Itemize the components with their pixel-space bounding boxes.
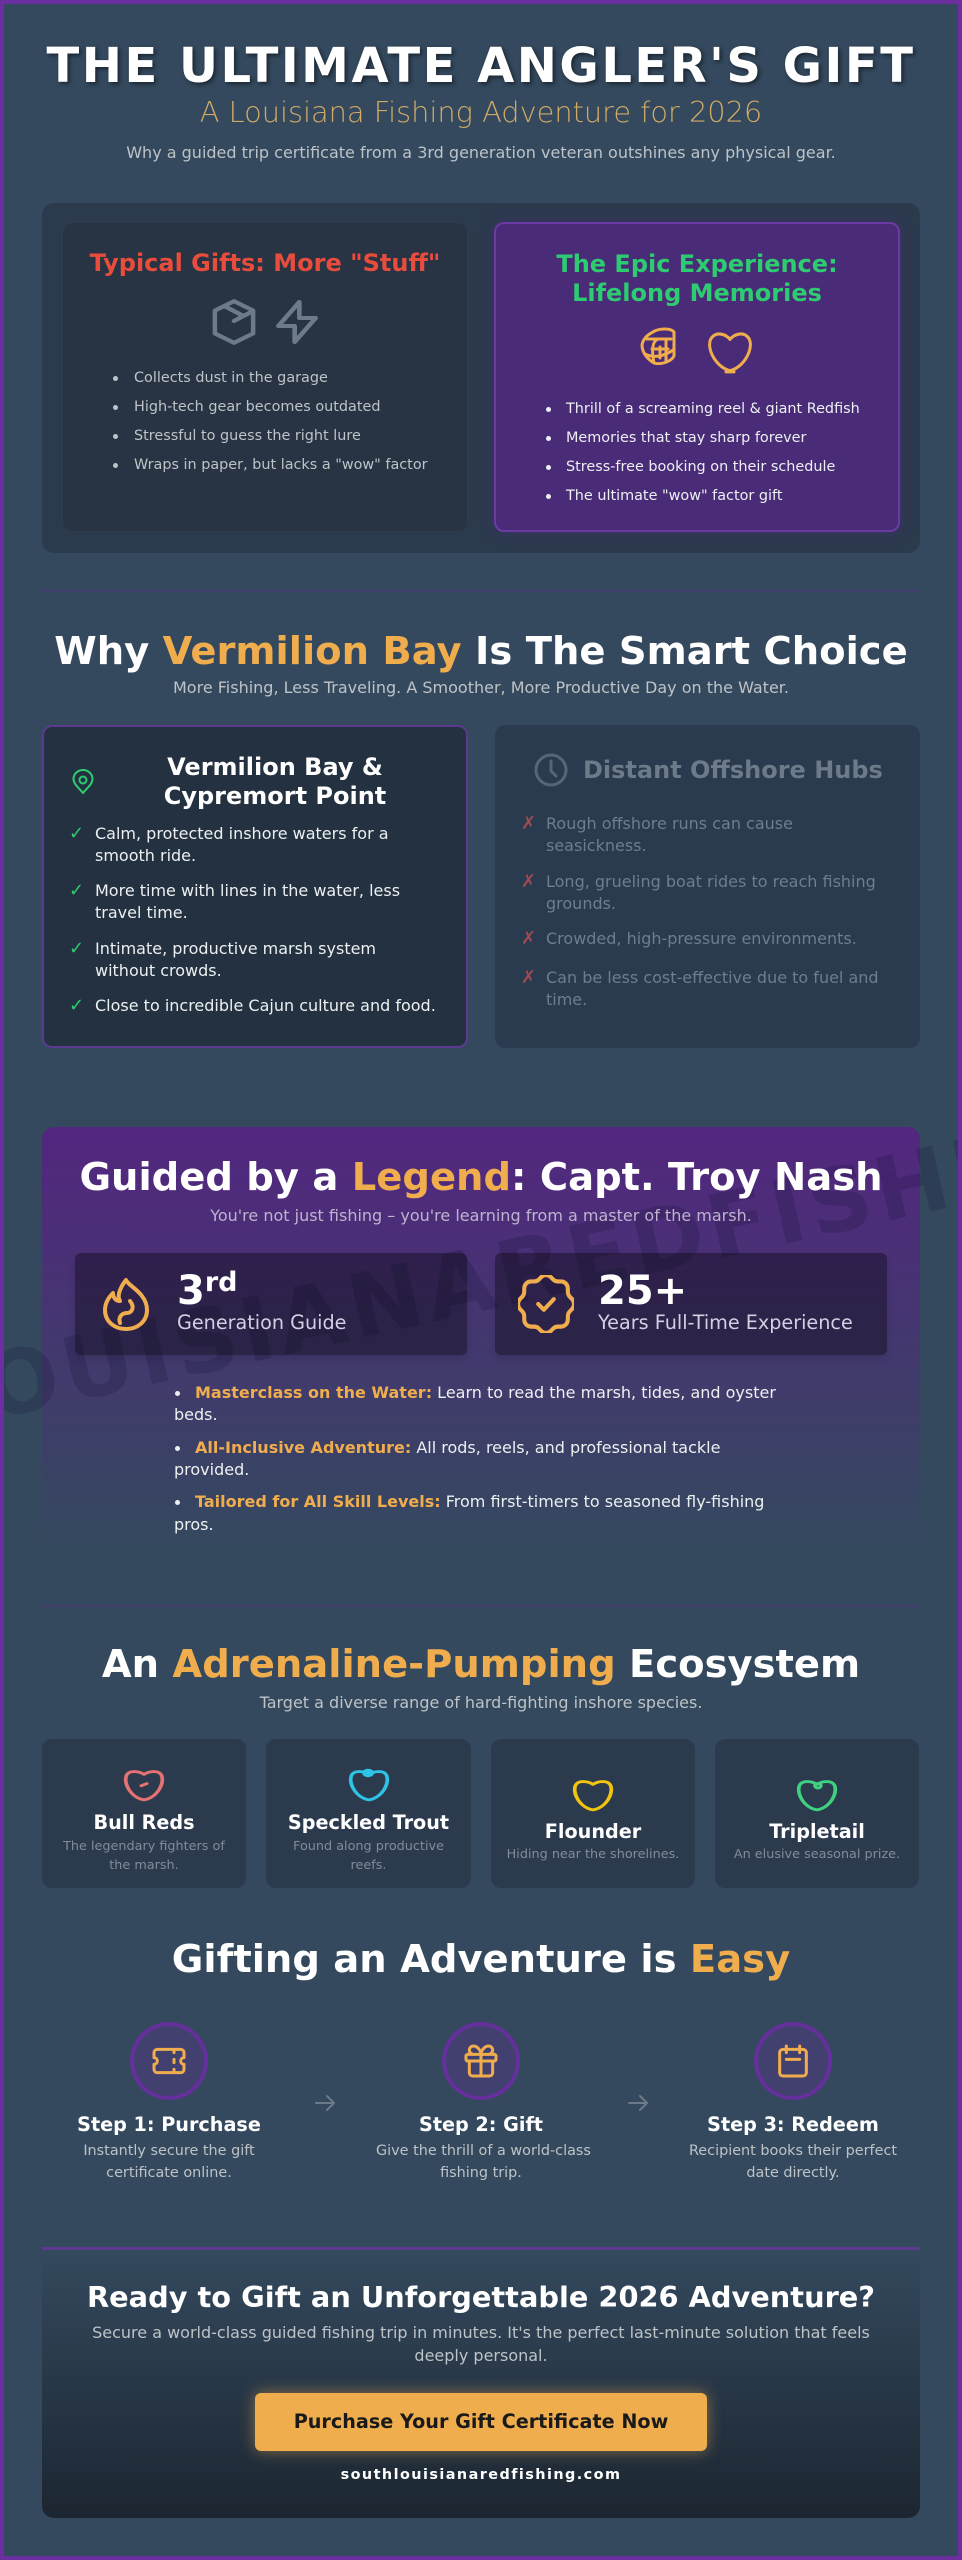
species card: tripletail xyxy=(715,1739,919,1888)
heading: vermilion bay xyxy=(164,752,386,810)
arrow: step 2 to 3 xyxy=(628,2095,648,2111)
step title: purchase: Step 1: Purchase xyxy=(77,2113,261,2136)
step description: purchase xyxy=(83,2143,255,2181)
arrow: step 1 to 2 xyxy=(315,2095,335,2111)
list: vermilion bay benefits xyxy=(69,823,436,1016)
species card: flounder xyxy=(491,1739,695,1888)
description: speckled trout: Found along productive xyxy=(293,1839,444,1854)
list: vermilion bay benefits: Close to incredible Cajun culture and food. xyxy=(95,996,436,1015)
icon: map pin xyxy=(72,769,94,794)
list: typical gift drawbacks: High-tech gear becomes outdated xyxy=(134,399,380,415)
list: vermilion bay benefits: smooth ride. xyxy=(95,846,196,865)
list: typical gift drawbacks: Wraps in paper, but lacks a "wow" factor xyxy=(134,457,428,473)
icon: gift xyxy=(442,2022,520,2100)
heading: epic experience: Lifelong Memories xyxy=(572,278,822,306)
list: offshore drawbacks: ✗ xyxy=(521,967,536,988)
step title: gift: Step 2: Gift xyxy=(419,2113,543,2136)
list: trip highlights xyxy=(174,1383,776,1534)
panel: call to action xyxy=(42,2247,920,2518)
list: vermilion bay benefits: Intimate, productive marsh system xyxy=(95,939,376,958)
description: bull reds: the marsh. xyxy=(109,1858,179,1873)
stat: 3rd: 3rd xyxy=(177,1267,238,1314)
heading: epic experience: The Epic Experience: xyxy=(556,250,838,278)
heading: epic experience xyxy=(556,250,838,306)
name: tripletail: Tripletail xyxy=(769,1820,865,1843)
stat card: generation xyxy=(75,1253,467,1355)
heading: gifting is easy: Gifting an Adventure is Easy xyxy=(172,1937,790,1982)
icon: rosette check xyxy=(518,1275,574,1333)
subtitle: A Louisiana Fishing Adventure for 2026 xyxy=(200,95,762,129)
list: vermilion bay benefits: travel time. xyxy=(95,903,188,922)
name: bull reds: Bull Reds xyxy=(93,1811,195,1834)
list: vermilion bay benefits: without crowds. xyxy=(95,961,222,980)
icon: box xyxy=(212,299,256,345)
button: purchase: Purchase Your Gift Certificate Now xyxy=(294,2410,668,2433)
description: speckled trout xyxy=(293,1839,444,1873)
list: typical gift drawbacks: Collects dust in the garage xyxy=(134,370,328,386)
list: offshore drawbacks: Can be less cost-effective due to fuel and xyxy=(546,968,879,987)
list: vermilion bay benefits: ✓ xyxy=(69,880,84,901)
list: trip highlights: provided. xyxy=(174,1460,249,1479)
list: offshore drawbacks: grounds. xyxy=(546,894,616,913)
list: vermilion bay benefits: More time with lines in the water, less xyxy=(95,881,400,900)
icon: clock xyxy=(534,754,568,786)
panel: gift comparison xyxy=(42,203,920,553)
icon: green fish xyxy=(796,1780,838,1812)
website url: southlouisianaredfishing.com xyxy=(341,2467,621,2483)
icon: blue fish xyxy=(348,1768,390,1802)
heading: typical gifts: Typical Gifts: More "Stuff" xyxy=(90,249,440,277)
heading: why vermilion bay: Why Vermilion Bay Is The Smart Choice xyxy=(54,629,908,674)
list: offshore drawbacks: seasickness. xyxy=(546,836,647,855)
list: offshore drawbacks xyxy=(521,813,879,1009)
list: vermilion bay benefits: ✓ xyxy=(69,823,84,844)
list: experience benefits: Thrill of a screaming reel & giant Redfish xyxy=(566,401,860,417)
list: offshore drawbacks: ✗ xyxy=(521,928,536,949)
stat label: years experience: Years Full-Time Experience xyxy=(598,1311,853,1334)
list: vermilion bay benefits: Calm, protected inshore waters for a xyxy=(95,824,389,843)
step description: redeem: date directly. xyxy=(746,2165,840,2181)
stat card: years xyxy=(495,1253,887,1355)
heading: vermilion bay: Cypremort Point xyxy=(164,782,386,810)
list: experience benefits: The ultimate "wow" factor gift xyxy=(566,488,782,504)
text: call to action: Secure a world-class guided fishing trip in minutes. It's the perfect last-minute solution that feels xyxy=(92,2323,870,2342)
list: offshore drawbacks: ✗ xyxy=(521,871,536,892)
list: vermilion bay benefits: ✓ xyxy=(69,938,84,959)
step description: gift: Give the thrill of a world-class xyxy=(376,2143,591,2159)
list: trip highlights: All-Inclusive Adventure: All rods, reels, and professional tackle xyxy=(195,1438,720,1457)
subheading: species: Target a diverse range of hard-fighting inshore species. xyxy=(260,1693,702,1712)
list: offshore drawbacks: Rough offshore runs can cause xyxy=(546,814,793,833)
list: trip highlights: Masterclass on the Water: Learn to read the marsh, tides, and oyster xyxy=(195,1383,776,1402)
species card: speckled trout xyxy=(266,1739,471,1888)
step 3: redeem xyxy=(689,2022,897,2181)
description: bull reds xyxy=(63,1839,226,1873)
text: call to action: deeply personal. xyxy=(414,2346,548,2364)
list: experience benefits: Memories that stay sharp forever xyxy=(566,430,806,446)
subheading: master of the marsh: You're not just fishing – you're learning from a master of the marsh. xyxy=(210,1206,752,1225)
list: trip highlights: Tailored for All Skill Levels: From first-timers to seasoned fly-fishing xyxy=(195,1492,764,1511)
step title: redeem: Step 3: Redeem xyxy=(707,2113,879,2136)
heading: adrenaline-pumping ecosystem: An Adrenaline-Pumping Ecosystem xyxy=(102,1642,860,1687)
description: tripletail: An elusive seasonal prize. xyxy=(734,1847,900,1862)
list: vermilion bay benefits: ✓ xyxy=(69,995,84,1016)
step description: purchase: Instantly secure the gift xyxy=(83,2143,255,2159)
heading: guided by a legend: Guided by a Legend: Capt. Troy Nash xyxy=(79,1155,883,1200)
panel: typical gifts xyxy=(62,222,468,532)
title: THE ULTIMATE ANGLER'S GIFT xyxy=(47,38,915,94)
species card: bull reds xyxy=(42,1739,246,1888)
description: speckled trout: reefs. xyxy=(351,1858,386,1873)
description: bull reds: The legendary fighters of xyxy=(63,1839,225,1854)
step 1: purchase xyxy=(77,2022,261,2181)
stat label: generation guide: Generation Guide xyxy=(177,1311,346,1334)
panel: distant offshore hubs xyxy=(495,725,920,1048)
icon: lightning bolt xyxy=(276,300,318,344)
list: experience benefits xyxy=(546,401,860,504)
list: trip highlights: beds. xyxy=(174,1405,218,1424)
panel: captain troy nash xyxy=(42,1127,920,1553)
name: flounder: Flounder xyxy=(545,1820,641,1843)
header xyxy=(46,38,916,162)
panel: epic experience xyxy=(494,222,900,532)
step description: gift xyxy=(376,2143,591,2181)
icon: yellow fish xyxy=(572,1780,614,1812)
list: typical gift drawbacks xyxy=(113,370,428,473)
list: offshore drawbacks: ✗ xyxy=(521,813,536,834)
tagline: Why a guided trip certificate from a 3rd generation veteran outshines any physical gear. xyxy=(126,143,836,162)
list: offshore drawbacks: Crowded, high-pressure environments. xyxy=(546,929,857,948)
text: call to action xyxy=(92,2323,870,2364)
heading: ready to gift: Ready to Gift an Unforgettable 2026 Adventure? xyxy=(87,2280,875,2314)
button: purchase xyxy=(255,2393,707,2451)
icon: heart xyxy=(708,332,752,374)
heading: distant offshore hubs: Distant Offshore Hubs xyxy=(583,756,883,784)
name: speckled trout: Speckled Trout xyxy=(288,1811,449,1834)
list: trip highlights: pros. xyxy=(174,1515,214,1534)
list: experience benefits: Stress-free booking on their schedule xyxy=(566,459,835,475)
step description: redeem: Recipient books their perfect xyxy=(689,2143,897,2159)
step 2: gift xyxy=(376,2022,591,2181)
heading: vermilion bay: Vermilion Bay & xyxy=(167,752,383,780)
icon: scribbled photo xyxy=(640,328,676,366)
list: offshore drawbacks: time. xyxy=(546,990,587,1009)
list: offshore drawbacks: Long, grueling boat rides to reach fishing xyxy=(546,872,876,891)
list: typical gift drawbacks: Stressful to guess the right lure xyxy=(134,428,361,444)
icon: calendar xyxy=(754,2022,832,2100)
description: flounder: Hiding near the shorelines. xyxy=(507,1847,679,1862)
step description: purchase: certificate online. xyxy=(106,2165,232,2181)
stat: 25+: 25+ xyxy=(598,1268,687,1314)
icon: flame xyxy=(103,1278,149,1331)
subheading: why vermilion bay: More Fishing, Less Traveling. A Smoother, More Productive Day on the Water. xyxy=(173,678,789,697)
step description: redeem xyxy=(689,2143,897,2181)
icon: red fish xyxy=(124,1770,164,1802)
step description: gift: fishing trip. xyxy=(440,2165,522,2181)
panel: vermilion bay xyxy=(42,725,468,1048)
icon: ticket xyxy=(130,2022,208,2100)
